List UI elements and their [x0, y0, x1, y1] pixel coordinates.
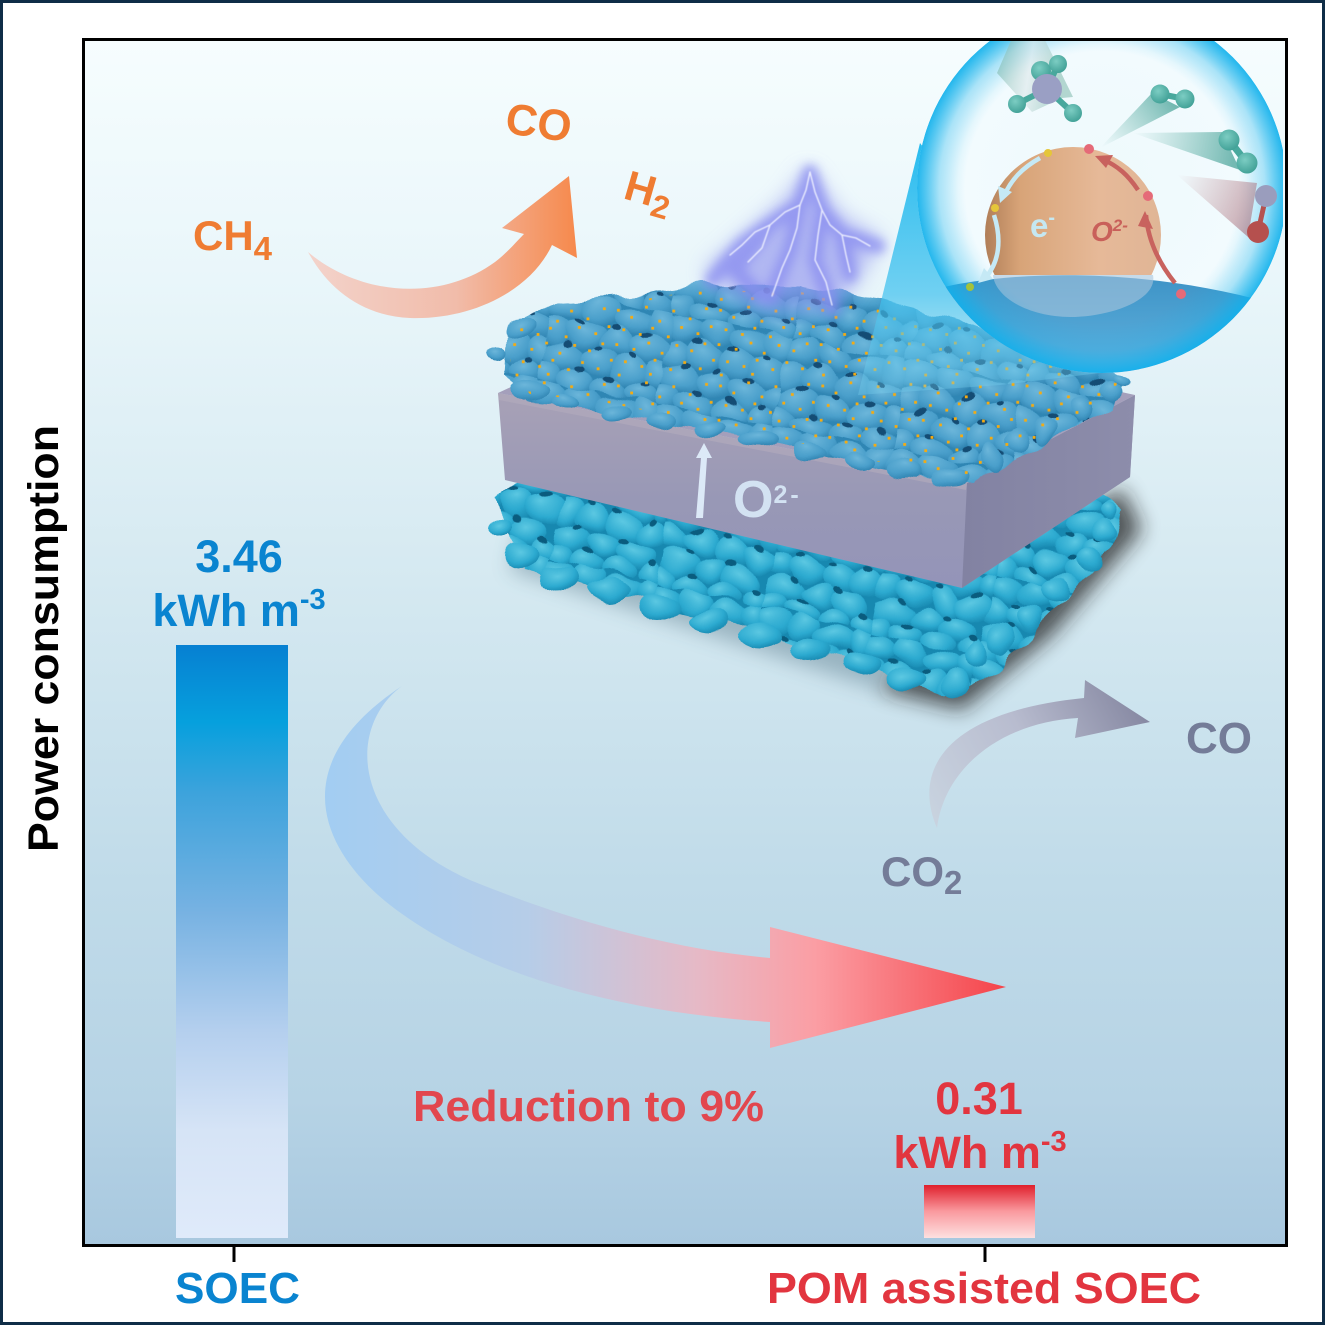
arrow: power reduction	[325, 686, 1006, 1048]
value: SOEC power	[152, 531, 326, 636]
label: H2 product: 2	[647, 187, 674, 227]
lightning discharge	[705, 168, 882, 312]
electrolyte slab	[498, 300, 1135, 588]
value: SOEC power: 3.46	[195, 531, 283, 582]
label: oxide ion: O	[1091, 216, 1113, 247]
electron path	[986, 158, 1040, 277]
bar: POM assisted SOEC	[924, 1185, 1035, 1238]
label: CO2: CO	[881, 848, 944, 895]
cathode porous layer	[488, 480, 1122, 697]
anode porous layer	[489, 284, 1131, 487]
magnified view	[858, 41, 1283, 395]
label: CH4: CH	[193, 212, 254, 259]
molecule: CO	[1185, 176, 1277, 243]
label: H2 product: H	[620, 161, 662, 215]
value: SOEC power: -3	[300, 584, 326, 616]
label: reduction: Reduction to 9%	[413, 1082, 764, 1131]
arrow: oxide ion transport	[696, 443, 712, 518]
molecule: CH4	[997, 36, 1082, 122]
arrow: CH4 to CO and H2	[308, 176, 577, 318]
label: electron: -	[1048, 207, 1055, 229]
bubble ring	[917, 41, 1283, 373]
value: POM assisted SOEC power: kWh m	[893, 1127, 1041, 1178]
bar: SOEC	[176, 645, 288, 1238]
particle reflection	[993, 275, 1153, 317]
label: CO: CO	[1186, 714, 1252, 763]
x label: POM assisted SOEC: POM assisted SOEC	[767, 1264, 1201, 1313]
label: CH4: 4	[254, 230, 273, 267]
label: O2- on slab: 2-	[773, 481, 802, 509]
electron arrowheads	[978, 186, 1012, 283]
reaction site dots	[966, 144, 1186, 299]
oxide ion path	[1102, 159, 1175, 283]
value: POM assisted SOEC power	[893, 1073, 1067, 1178]
arrow: CO2 to CO	[929, 680, 1150, 828]
oxide ion arrowheads	[1095, 155, 1153, 229]
label: CO2: 2	[944, 864, 962, 901]
value: POM assisted SOEC power: 0.31	[935, 1073, 1023, 1124]
label: oxide ion: 2-	[1112, 216, 1128, 235]
x label: SOEC: SOEC	[175, 1264, 300, 1313]
value: SOEC power: kWh m	[152, 585, 300, 636]
label: CO product: CO	[503, 94, 575, 152]
molecule: H2 (2)	[1133, 130, 1258, 174]
molecule: H2 (1)	[1106, 84, 1194, 144]
label: O2- on slab: O	[733, 471, 773, 529]
zoom cone	[858, 143, 1100, 395]
bubble	[917, 41, 1283, 373]
label: electron: e	[1030, 207, 1048, 244]
value: POM assisted SOEC power: -3	[1041, 1126, 1067, 1158]
dome particle	[985, 147, 1161, 275]
cell shadow	[510, 488, 1142, 710]
electrode surface	[946, 275, 1251, 373]
catalyst nanoparticles	[510, 290, 1120, 476]
axis title: Power consumption	[20, 425, 68, 852]
